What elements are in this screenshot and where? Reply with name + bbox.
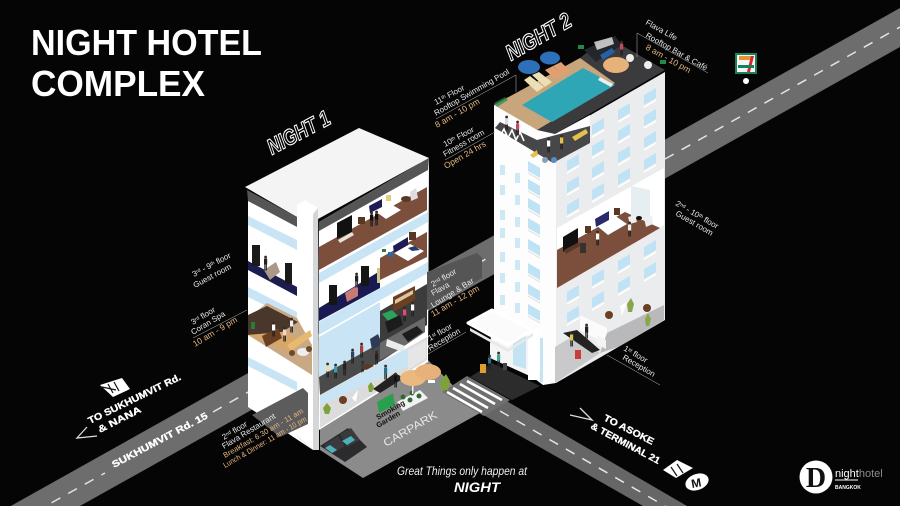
label: Flava Life rooftop bar (637, 18, 710, 75)
label: fitness room: th (450, 135, 457, 143)
label: Flava Life rooftop bar: Rooftop Bar & Café (644, 31, 710, 73)
tagline (397, 464, 528, 495)
label: Coran Spa: 10 am - 9 pm (191, 314, 239, 349)
rooftop terrace (537, 46, 665, 135)
carpark label: CARPARK (382, 409, 440, 450)
Night 1 corner pillar (297, 200, 319, 450)
label: 1st floor reception (Night 2): 1 (622, 344, 630, 354)
label: Flava Life rooftop bar: Flava Life (644, 18, 679, 43)
Night 2 right face (556, 72, 665, 383)
direction: to Asoke & Terminal 21: & TERMINAL 21 (589, 421, 662, 467)
restaurant wall and floor (319, 262, 428, 395)
label: fitness room: Floor (453, 125, 476, 143)
Night 1 fascia (247, 158, 429, 231)
crosswalk (442, 376, 510, 416)
label: Flava Life rooftop bar: 8 am - 10 pm (644, 42, 693, 75)
label: 2nd-10th floor guest room: th (698, 213, 704, 220)
label: fitness room (442, 125, 495, 171)
second floor guest room (319, 232, 427, 321)
road label: Sukhumvit Rd. 15: SUKHUMVIT Rd. 15 (110, 410, 211, 471)
label: 2nd-10th floor guest room: 2 (674, 199, 682, 209)
rooftop deck (494, 58, 615, 130)
label: guest room 3rd-9th floor: floor (212, 251, 233, 267)
patio umbrellas (400, 364, 450, 394)
building: Night 2 (468, 36, 666, 385)
label: Flava Restaurant: floor (229, 420, 249, 437)
label: Coran Spa: Coran Spa (189, 309, 227, 337)
direction: to Sukhumvit & Nana: & NANA (96, 404, 143, 436)
label: rooftop swimming pool: th (441, 94, 447, 101)
fitness room (494, 105, 590, 163)
label: Flava Lounge & Bar: 11 am - 12 pm (429, 283, 481, 319)
reception room (555, 298, 664, 383)
label: Flava Lounge & Bar: nd (434, 277, 442, 285)
label: Coran Spa (189, 305, 247, 349)
left face windows (500, 161, 540, 323)
guests with luggage (480, 352, 507, 373)
label: Coran Spa: 3 (189, 317, 198, 327)
Smoking Garden: Garden (374, 409, 402, 430)
label: 1st floor reception (Night 2): Reception (621, 353, 657, 379)
label: rooftop swimming pool: 8 am - 10 pm (433, 96, 481, 130)
title: NIGHT HOTEL (31, 22, 262, 63)
hotel logo: BANGKOK (835, 485, 861, 491)
label: guest room 3rd-9th floor (191, 251, 233, 290)
hotel entrance driveway (470, 363, 540, 400)
label: 2nd-10th floor guest room: nd (679, 202, 687, 210)
label: 1st floor reception (Night 1): 1 (426, 333, 435, 343)
label: Flava Restaurant (220, 388, 308, 470)
top guest room (319, 187, 428, 283)
label: 2nd-10th floor guest room: Guest room (674, 209, 715, 238)
label: 1st floor reception (Night 1): Reception (426, 326, 462, 353)
label: 1st floor reception (Night 1): st (431, 331, 438, 339)
swimming pool (522, 68, 615, 122)
label: guest room 3rd-9th floor: th (209, 260, 216, 267)
label: guest room 3rd-9th floor: Guest room (192, 262, 233, 290)
title: COMPLEX (31, 63, 205, 104)
Night 1 left face (248, 198, 313, 450)
title (31, 22, 262, 104)
label: Flava Lounge & Bar: 2 (430, 279, 438, 289)
hotel logo: D (806, 463, 826, 494)
parked cars (320, 428, 367, 462)
7-Eleven marker (735, 53, 757, 84)
label: Flava Restaurant: Flava Restaurant (220, 411, 278, 451)
label: Flava Lounge & Bar: Lounge & Bar (429, 276, 476, 310)
label: rooftop swimming pool: Rooftop Swimming Pool (432, 67, 511, 118)
label: 1st floor reception (Night 2): st (627, 347, 634, 354)
label: fitness room: 10 (442, 137, 454, 149)
building: Night 1 (245, 128, 450, 462)
entrance canopy (468, 310, 543, 382)
icon: BTS (100, 378, 130, 397)
right face windows (567, 88, 656, 325)
direction: to Sukhumvit & Nana: TO SUKHUMVIT Rd. (86, 372, 183, 427)
label: Flava Restaurant: 2 (220, 432, 229, 442)
Smoking Garden (374, 390, 428, 430)
label: Flava Restaurant: nd (225, 430, 233, 438)
icon: BTS and MRT: M (690, 475, 702, 491)
rooftop bar (584, 36, 623, 62)
Night 1 right face (319, 158, 429, 430)
pool umbrellas and loungers (494, 45, 666, 107)
label: Coran Spa: rd (194, 315, 201, 323)
label: rooftop swimming pool: 11 (433, 95, 444, 107)
label: 1st floor reception (Night 2): floor (629, 348, 649, 365)
label: 1st floor reception (Night 1): floor (434, 322, 454, 339)
label: Flava Lounge & Bar: floor (438, 267, 458, 284)
label: rooftop swimming pool: Floor (444, 83, 466, 101)
label: fitness room: Fitness room (442, 128, 486, 159)
Coran Spa room (248, 303, 312, 375)
guest room cutaway (557, 168, 664, 288)
label: Flava Restaurant: Breakfast: 6.30 am - 11 am (222, 406, 305, 460)
label: guest room 3rd-9th floor: rd (195, 267, 202, 275)
label: 2nd-10th floor guest room (674, 199, 720, 238)
label: Flava Restaurant: Lunch & Dinner: 11 am - 10 pm (222, 414, 308, 470)
direction: to Asoke & Terminal 21: TO ASOKE (602, 413, 656, 448)
hotel logo: nighthotel (835, 468, 883, 480)
hotel logo (800, 460, 883, 494)
icon: BTS and MRT (663, 460, 711, 494)
tagline: Great Things only happen at (397, 464, 528, 478)
left face windows and rooms (248, 216, 297, 391)
label: Flava Lounge & Bar (427, 253, 482, 319)
direction: to Asoke & Terminal 21 (570, 408, 662, 467)
tagline: NIGHT (454, 479, 502, 495)
road: towards Asoke (467, 378, 687, 506)
label: 1st floor reception (Night 2) (607, 344, 660, 385)
ground floor lobby (320, 337, 427, 428)
label: 2nd-10th floor guest room: - 10 (683, 204, 702, 220)
Night 2 left face (490, 105, 556, 385)
carpark ground (320, 358, 480, 478)
Smoking Garden: Smoking (374, 398, 407, 422)
Night 1 roof (245, 128, 429, 219)
label: Coran Spa: floor (197, 305, 217, 322)
Night 1 heading: NIGHT 1 (263, 105, 334, 159)
Night 2 heading: NIGHT 2 (501, 7, 576, 65)
label: 2nd-10th floor guest room: floor (700, 214, 720, 231)
label: Flava Lounge & Bar: Flava (430, 280, 451, 298)
Flava Lounge room (380, 284, 427, 360)
label: guest room 3rd-9th floor: - 9 (199, 261, 213, 275)
label: fitness room: Open 24 hrs (442, 139, 488, 171)
label: guest room 3rd-9th floor: 3 (191, 269, 199, 279)
direction: to Sukhumvit & Nana (77, 372, 183, 438)
